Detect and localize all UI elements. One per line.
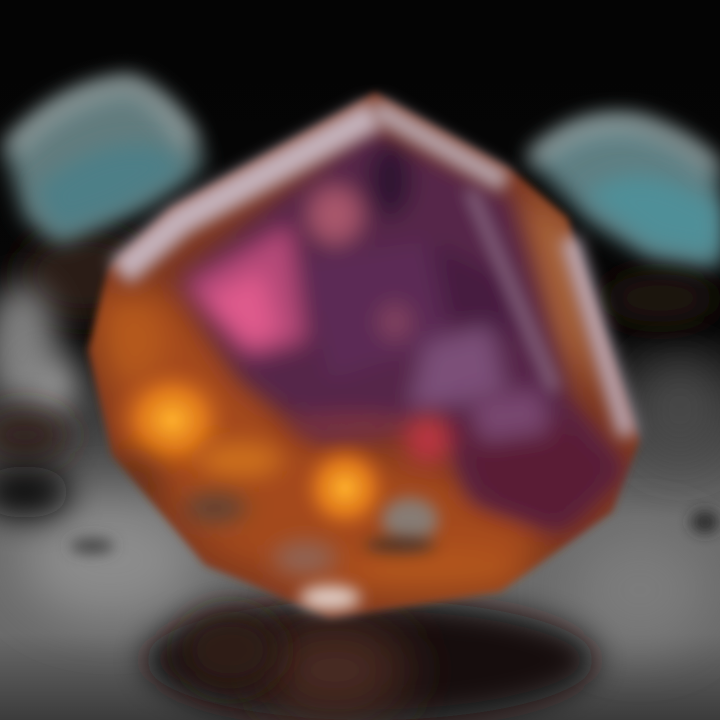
inclusion: lower left xyxy=(183,493,247,523)
glow: bottom amber xyxy=(303,441,387,530)
facet: lower orange body xyxy=(88,190,600,600)
facet: lower-right plum xyxy=(290,388,620,530)
glow: left amber xyxy=(115,370,226,470)
facet edge: inner right highlight xyxy=(470,190,555,390)
gemstone xyxy=(88,92,640,618)
stone: right blue xyxy=(530,119,720,322)
inclusion: grey xyxy=(382,498,438,542)
facet edge: bottom highlight xyxy=(300,586,360,610)
facet edge: top right highlight xyxy=(375,108,505,182)
facet: purple pink crown xyxy=(175,125,625,530)
stone: left grey and brown xyxy=(0,283,76,518)
facet edge: right highlight xyxy=(570,238,628,435)
stone: left blue xyxy=(5,82,205,320)
shadow: gem reflection xyxy=(145,600,595,720)
facet edge: top left highlight xyxy=(120,114,375,272)
